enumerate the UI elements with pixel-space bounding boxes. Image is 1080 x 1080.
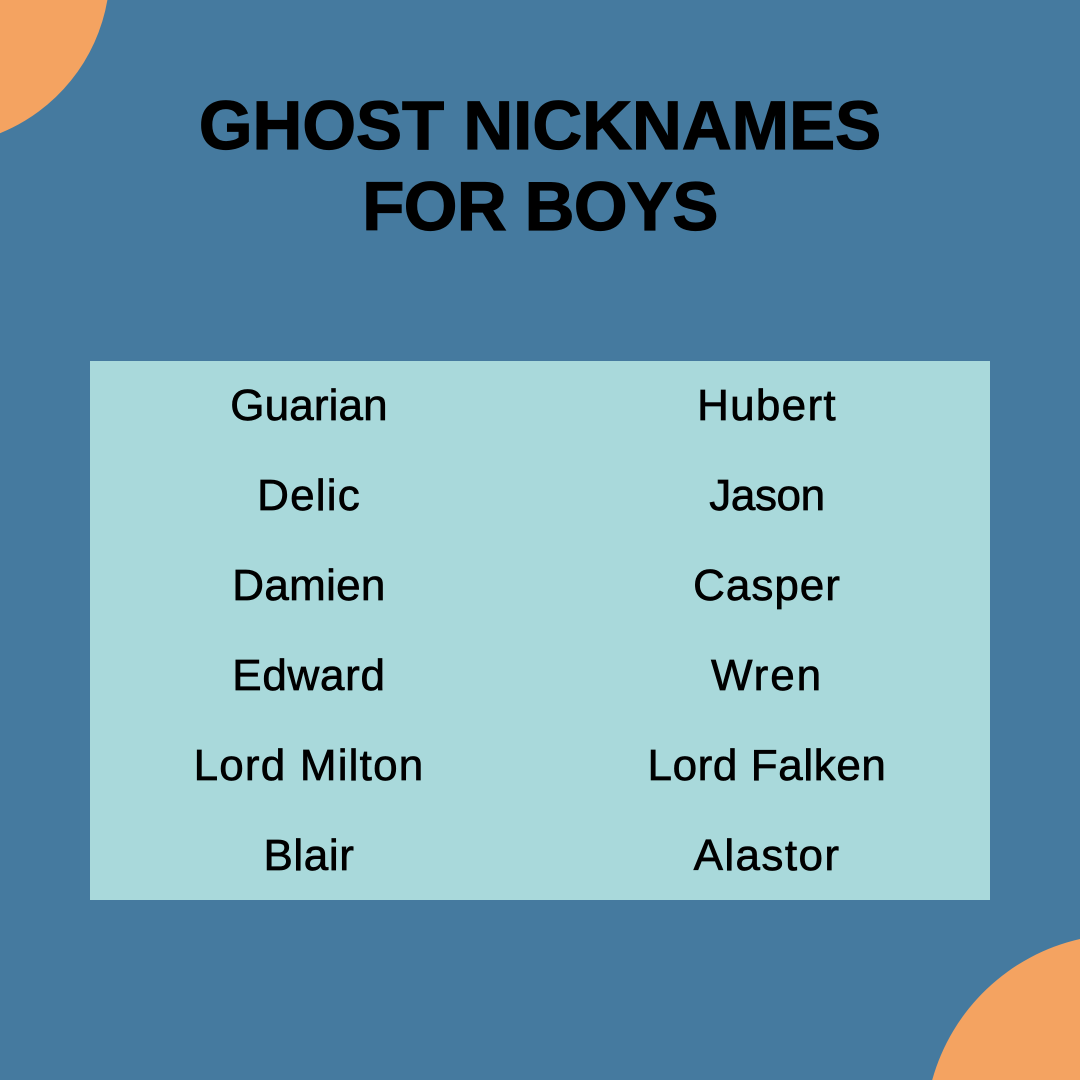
name: Hubert: Hubert [697,381,837,430]
name: Jason: Jason [709,471,825,520]
title: FOR BOYS [362,168,718,245]
name: Lord Falken: Lord Falken [648,741,886,790]
name: Lord Milton: Lord Milton [194,741,424,790]
name: Casper: Casper [693,561,841,610]
name: Guarian: Guarian [230,381,388,430]
name: Wren: Wren [711,651,823,700]
decorative orange circle: bottom right [932,939,1080,1080]
name: Alastor: Alastor [694,831,840,880]
name: Delic: Delic [257,471,361,520]
decorative orange circle: top left [0,0,108,134]
name: Edward: Edward [232,651,386,700]
name: Blair: Blair [263,831,355,880]
name: Damien: Damien [232,561,386,610]
panel: names list [90,361,990,900]
title: GHOST NICKNAMES [199,87,881,164]
title [199,87,881,245]
